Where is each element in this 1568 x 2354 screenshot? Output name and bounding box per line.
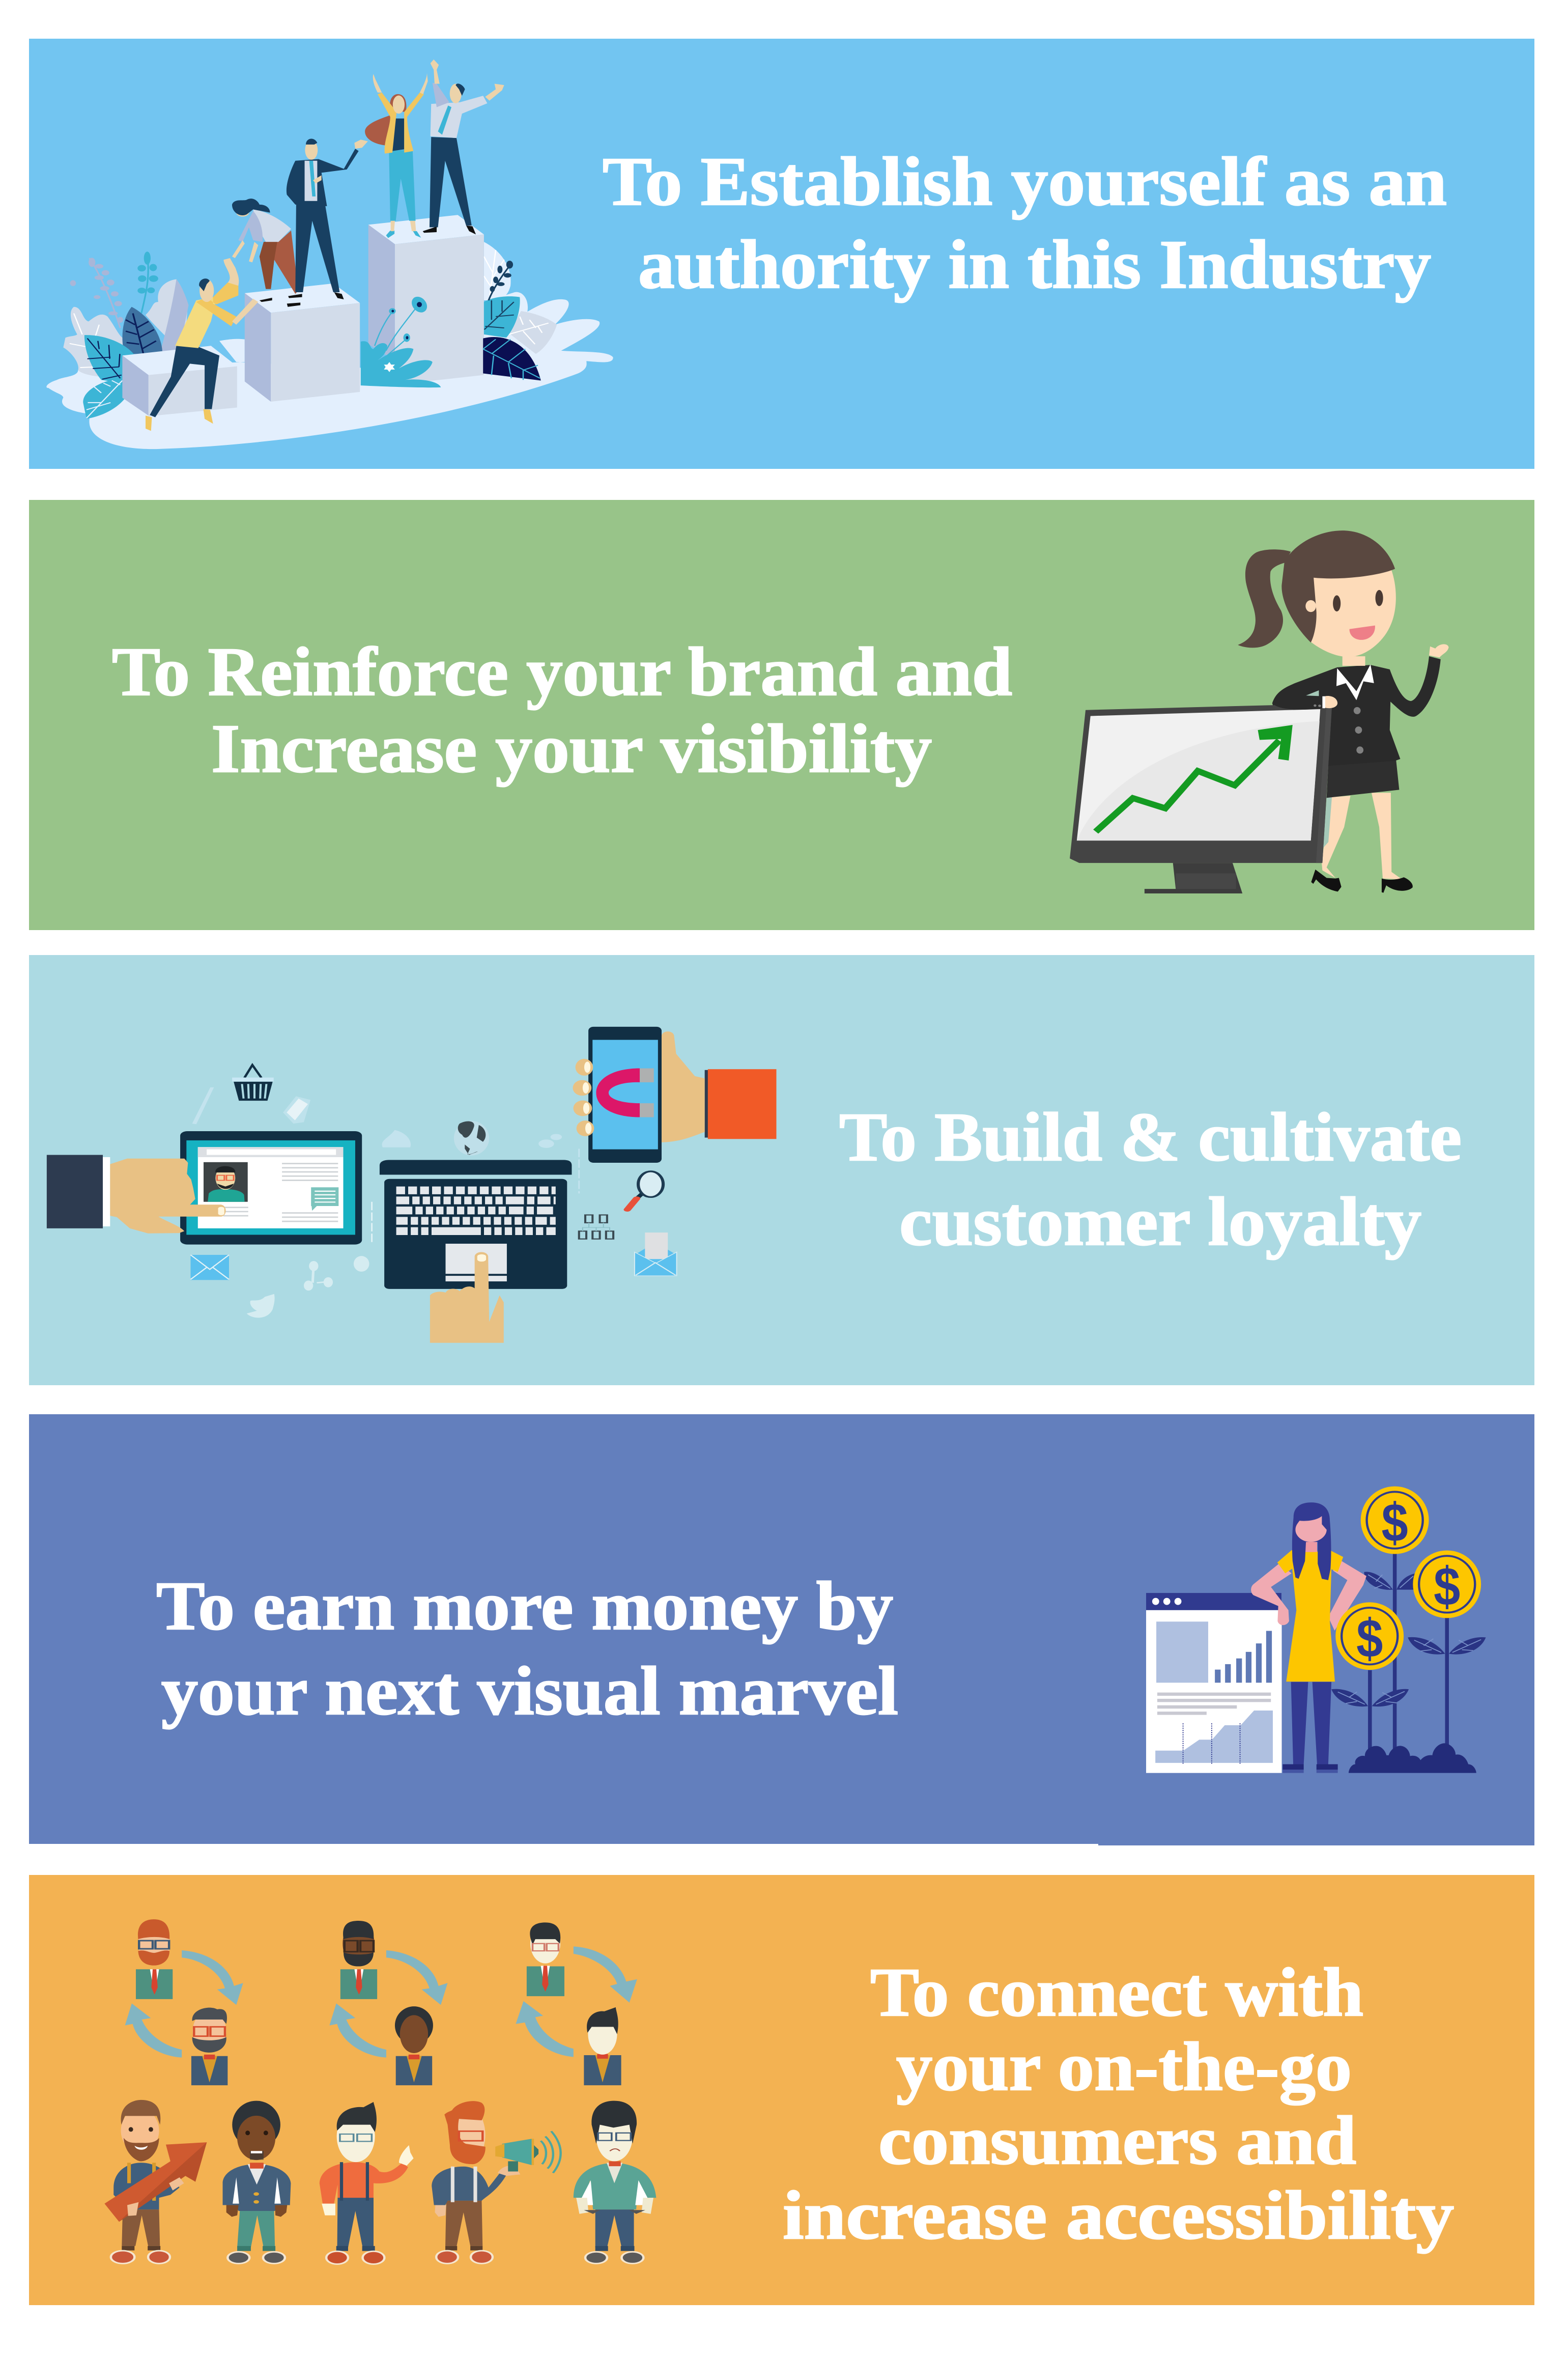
illustration: people climbing blocks <box>46 60 613 449</box>
figure: man in navy suit <box>287 139 368 299</box>
figure: man climbing in yellow shirt <box>146 258 258 431</box>
figure: sad man with empty pockets <box>574 2101 656 2263</box>
phone with magnet <box>588 1027 662 1163</box>
coin: lower <box>1335 1602 1404 1670</box>
icon: globe <box>454 1121 489 1156</box>
heading: connect with consumers: consumers and <box>878 2103 1356 2179</box>
heading: customer loyalty <box>839 1099 1462 1260</box>
coin: lower: $ <box>1356 1608 1383 1669</box>
panel: connect with consumers <box>29 1875 1534 2305</box>
illustration: people exchange and characters <box>104 1919 656 2264</box>
heading: reinforce brand: Increase your visibility <box>211 711 932 787</box>
heading: connect with consumers: increase accessibility <box>783 2177 1454 2254</box>
figure: man holding arrow <box>104 2100 207 2263</box>
report window <box>1146 1593 1282 1773</box>
heading: connect with consumers: To connect with <box>870 1954 1363 2031</box>
heading: reinforce brand <box>112 634 1012 787</box>
panel: establish authority <box>29 39 1534 469</box>
exchange group 1 <box>125 1919 243 2085</box>
money plants <box>1331 1553 1486 1773</box>
figure: businesswoman <box>1238 530 1449 893</box>
figure: woman in yellow dress <box>1251 1502 1366 1773</box>
heading: connect with consumers <box>783 1954 1454 2254</box>
figure: man with raised arms <box>423 60 504 234</box>
illustration: woman with report and money plants <box>1146 1487 1486 1773</box>
icon: envelope <box>190 1255 229 1280</box>
tablet with profile <box>180 1131 362 1245</box>
heading: earn more money <box>156 1568 898 1729</box>
laptop <box>380 1160 572 1289</box>
icon: org network <box>579 1215 613 1239</box>
heading: earn more money: your next visual marvel <box>161 1653 898 1729</box>
exchange group 3 <box>516 1922 637 2085</box>
heading: earn more money: To earn more money by <box>156 1568 893 1644</box>
monitor with rising chart <box>1070 704 1332 893</box>
illustration: devices and hands <box>47 1027 776 1343</box>
woman's arm on monitor <box>1272 695 1337 710</box>
hand pointing at tablet <box>47 1155 226 1234</box>
heading: customer loyalty: To Build & cultivate <box>839 1099 1462 1175</box>
coin: top: $ <box>1382 1493 1408 1553</box>
figure: man with megaphone <box>432 2101 561 2263</box>
figure: man in orange shirt <box>320 2102 414 2264</box>
heading: establish authority: To Establish yourself as an <box>603 144 1447 220</box>
panel: customer loyalty <box>29 955 1534 1385</box>
figure: man in blue blazer <box>223 2101 291 2263</box>
faint tag icon <box>287 1099 308 1120</box>
faint background icons <box>192 1087 579 1318</box>
exchange group 2 <box>329 1921 448 2085</box>
panel: earn more money <box>29 1414 1534 1845</box>
coin: top <box>1361 1487 1429 1554</box>
figure: woman with raised arms <box>365 73 428 238</box>
heading: establish authority: authority in this Industry <box>638 227 1431 303</box>
illustration: businesswoman with monitor <box>1070 530 1449 893</box>
heading: establish authority <box>603 144 1447 303</box>
icon: shopping basket <box>232 1065 274 1101</box>
coin: right: $ <box>1434 1557 1460 1617</box>
coin: right <box>1413 1551 1481 1618</box>
hand on trackpad <box>430 1252 504 1343</box>
heading: reinforce brand: To Reinforce your brand and <box>112 634 1012 710</box>
panel: reinforce brand <box>29 500 1534 930</box>
heading: customer loyalty: customer loyalty <box>899 1184 1421 1260</box>
hand holding phone <box>573 1031 776 1142</box>
heading: connect with consumers: your on-the-go <box>896 2029 1352 2105</box>
figure: woman helping <box>232 199 300 307</box>
icon: magnifying glass <box>628 1171 663 1210</box>
icon: envelope with letter <box>635 1232 677 1276</box>
